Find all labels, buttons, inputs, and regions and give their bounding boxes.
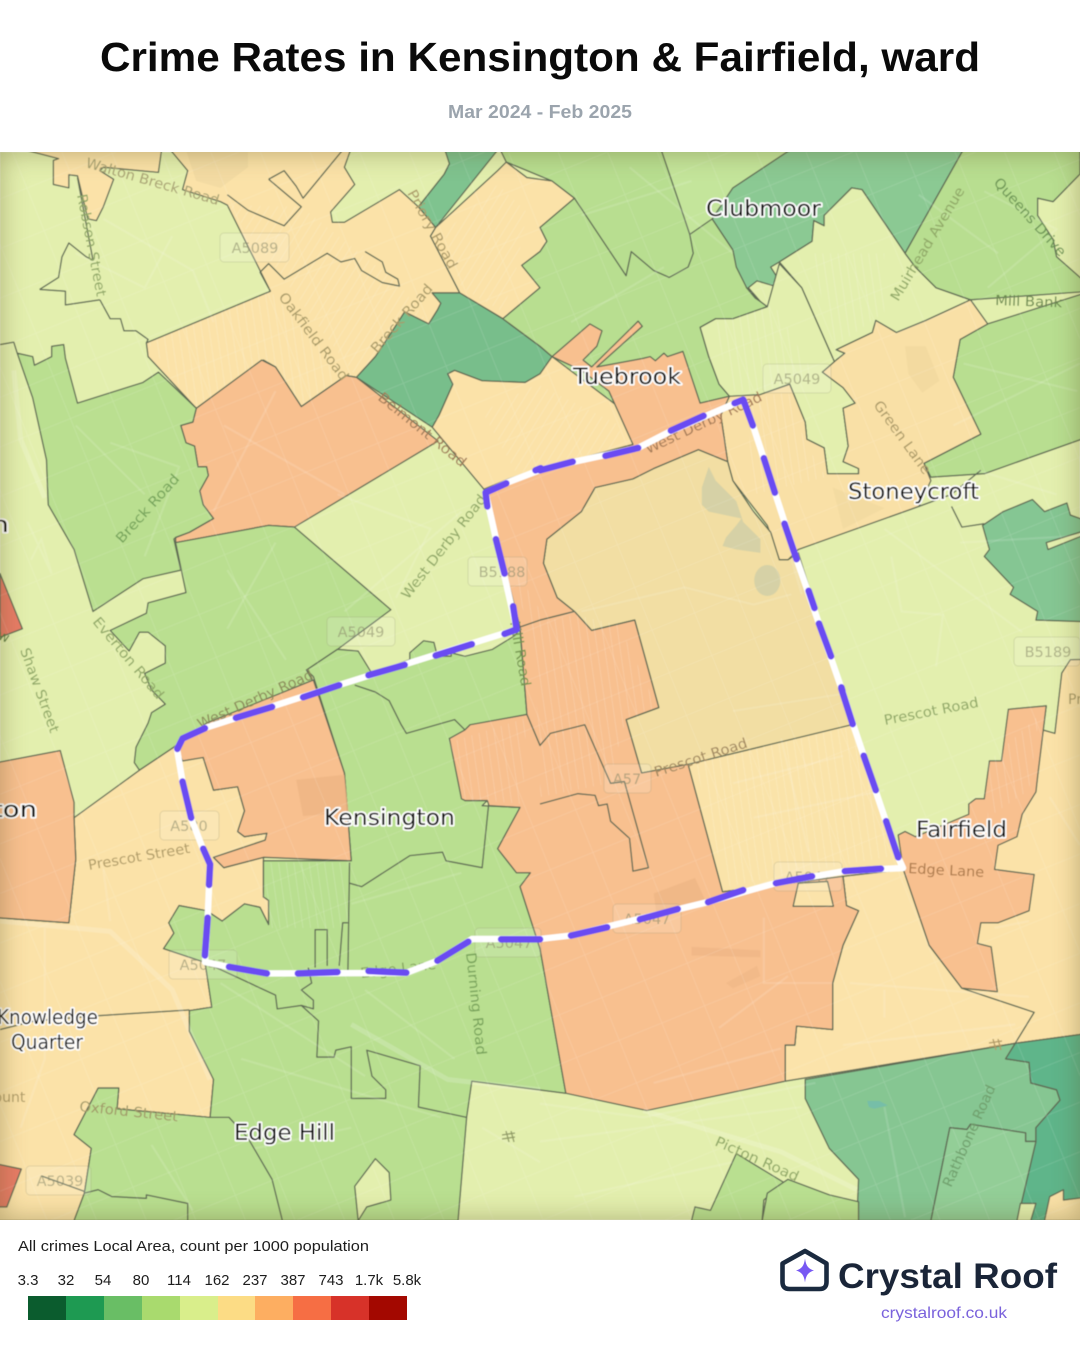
legend scale values: 5.8k	[393, 1272, 422, 1289]
road name labels: Mill Bank	[995, 293, 1063, 311]
road name labels: Prescot Street	[87, 841, 192, 874]
title: Crime Rates in Kensington & Fairfield, ward	[100, 34, 980, 80]
map edge vignette	[0, 152, 1080, 1220]
road name labels: Muirhead Avenue	[888, 184, 968, 304]
legend scale values: 237	[242, 1272, 268, 1289]
road name labels: Oakfield Road	[275, 290, 351, 384]
legend scale values: 54	[95, 1272, 111, 1289]
choropleth areas north-east	[500, 152, 1080, 772]
place name labels: Fairfield	[916, 818, 1007, 843]
ward boundary route white casing	[177, 400, 903, 973]
legend scale values: 80	[133, 1272, 149, 1289]
place name labels: Edge Hill	[234, 1121, 335, 1146]
road number shields: A580	[170, 819, 208, 835]
road name labels	[0, 155, 1080, 1190]
place name labels	[0, 197, 1007, 1146]
road name labels: Edge Lane	[360, 957, 437, 982]
road name labels: Hill Road	[506, 620, 533, 688]
road number shields: A5047	[180, 958, 226, 974]
road name labels: Walton Breck Road	[84, 155, 221, 209]
ward boundary route purple dashes	[177, 400, 898, 973]
road name labels: West Derby Road	[399, 492, 490, 602]
legend scale values: 3.3	[18, 1272, 38, 1289]
road name labels: Picton Road	[712, 1134, 801, 1185]
road name labels: Rathbone Road	[940, 1083, 999, 1190]
road number shields: A5089	[232, 241, 278, 257]
legend scale values: 32	[58, 1272, 74, 1289]
choropleth areas south-west	[0, 629, 566, 1221]
railway station icons	[502, 1039, 1002, 1142]
place name labels: Stoneycroft	[848, 480, 979, 505]
road name labels: Prescot Road	[883, 695, 980, 729]
place name labels: Kensington	[324, 806, 455, 831]
place name labels: Knowledge	[0, 1005, 98, 1029]
road name labels: Edge Lane	[908, 861, 985, 881]
legend scale values: 162	[204, 1272, 230, 1289]
legend scale values: 114	[167, 1272, 191, 1289]
road name labels: Breck Road	[113, 471, 183, 547]
road number shields: A5047	[785, 870, 831, 886]
road name labels: Robson Street	[73, 193, 109, 298]
road name labels: West Derby Road	[643, 389, 765, 458]
logo icon: house with star	[782, 1251, 826, 1289]
road name labels: Durning Road	[462, 952, 489, 1056]
road name labels: Breck Road	[368, 281, 436, 357]
legend scale values	[18, 1272, 422, 1289]
road number shields: A5049	[774, 372, 820, 388]
legend title: All crimes Local Area, count per 1000 population	[18, 1238, 369, 1255]
road number shields	[26, 233, 1080, 1195]
road number shields: A5049	[338, 625, 384, 641]
road name labels: Queens Drive	[990, 175, 1069, 260]
road number shields: B5189	[1025, 645, 1071, 661]
legend scale values: 743	[318, 1272, 344, 1289]
website url: crystalroof.co.uk	[881, 1305, 1008, 1322]
place name labels: Clubmoor	[706, 197, 822, 222]
road number shields: A5047	[486, 936, 532, 952]
road name labels: West Derby Road	[195, 667, 316, 733]
road name labels: Belmont Road	[374, 390, 469, 471]
place name labels: Quarter	[11, 1030, 84, 1054]
road number shields: A57	[613, 772, 641, 788]
logo wordmark: Crystal Roof	[838, 1257, 1057, 1296]
legend colour bar	[28, 1296, 407, 1320]
place name labels: Tuebrook	[572, 365, 681, 390]
road name labels: Prescot Road	[652, 736, 749, 781]
choropleth areas north-west	[0, 148, 635, 770]
road name labels: Shaw Street	[16, 646, 62, 736]
legend scale values: 1.7k	[355, 1272, 384, 1289]
road number shields: B5188	[479, 565, 525, 581]
street mesh texture	[0, 152, 1080, 1220]
legend scale values: 387	[280, 1272, 306, 1289]
road number shields: A5039	[37, 1174, 83, 1190]
road name labels: Oxford Street	[79, 1099, 179, 1125]
subtitle: date range: Mar 2024 - Feb 2025	[448, 102, 632, 122]
road name labels: Priory Road	[404, 187, 460, 272]
map panel	[0, 148, 1080, 1221]
road name labels: Everton Road	[89, 614, 167, 703]
road name labels: Green Lane	[870, 398, 934, 478]
choropleth areas south-east	[449, 321, 1080, 1221]
road number shields: A5047	[624, 912, 670, 928]
map base	[0, 152, 1080, 1220]
